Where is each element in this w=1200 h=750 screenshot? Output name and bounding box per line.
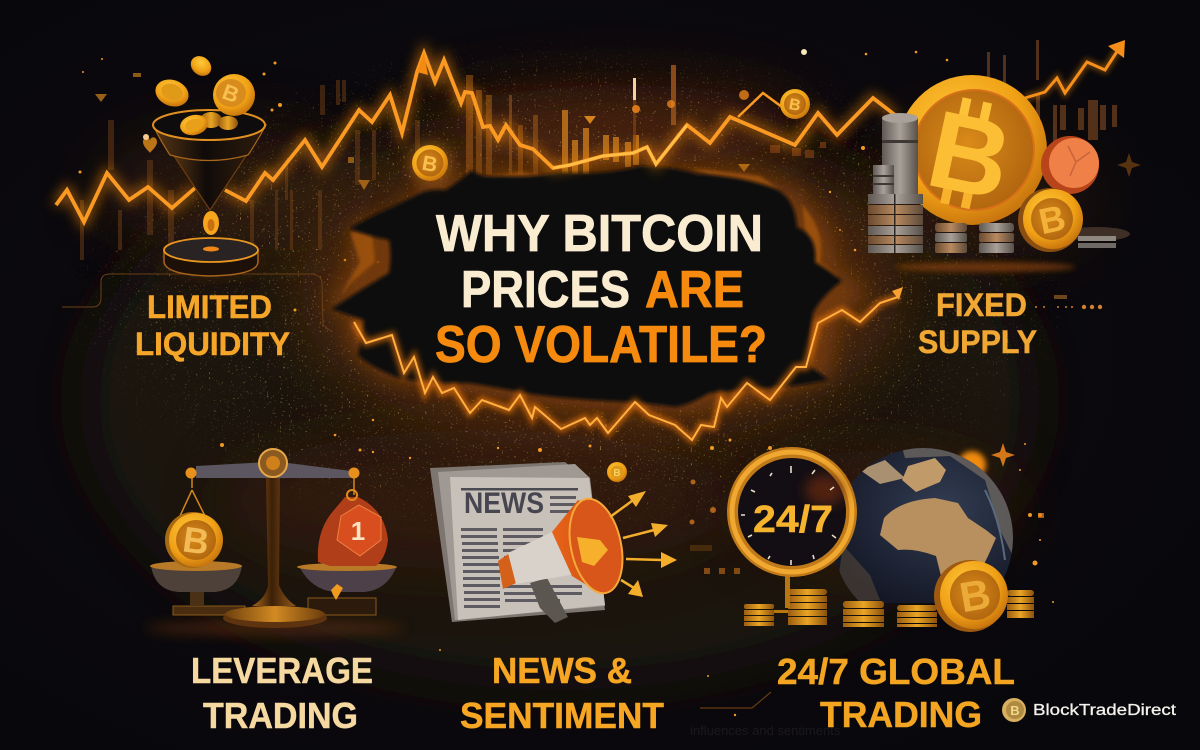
- icon: newspaper: [430, 462, 605, 622]
- icon: megaphone: [498, 494, 630, 623]
- background: [58, 36, 1098, 690]
- label: [135, 289, 290, 362]
- label: [918, 287, 1037, 360]
- sparkle stars: [632, 90, 1141, 574]
- particles: [78, 49, 1118, 716]
- logo coin: [1002, 698, 1026, 722]
- background candlestick bars: [80, 40, 1117, 260]
- icon: gold bitcoin coin: [934, 560, 1008, 632]
- icon: coins and stacks: [868, 75, 1130, 272]
- label: [191, 650, 373, 736]
- label: 24/7 GLOBAL: [777, 651, 1015, 692]
- label: SENTIMENT: [460, 695, 664, 736]
- dotted trail: [1035, 295, 1102, 309]
- icon: clock: 24/7: [753, 499, 833, 541]
- panel: 24/7 global trading: [700, 440, 1034, 735]
- connector bracket: [62, 274, 332, 332]
- label: TRADING: [203, 695, 358, 736]
- icon: globe: [836, 446, 1013, 603]
- central splatter: dark patch: [332, 166, 842, 407]
- icon: coin stacks: [744, 589, 1034, 627]
- title: PRICES: [461, 261, 630, 319]
- title: [435, 205, 767, 374]
- title: WHY BITCOIN: [436, 205, 763, 263]
- faint caption: influences and sentiments: [690, 723, 841, 738]
- label: TRADING: [820, 694, 982, 735]
- label: SUPPLY: [918, 324, 1037, 360]
- icon: arrows and coin: [610, 491, 677, 597]
- icon: balance scale: B: [180, 518, 212, 563]
- panel: news and sentiment: B: [613, 468, 621, 479]
- brand logo: [1002, 698, 1177, 722]
- panel: leverage trading: [145, 449, 405, 736]
- icon: balance scale: [145, 449, 405, 636]
- logo coin: B: [1010, 703, 1020, 718]
- icon: funnel with coins: B: [219, 79, 243, 108]
- small coin on price line: B: [788, 96, 802, 115]
- label: LEVERAGE: [191, 650, 373, 691]
- icon: clock: [727, 447, 857, 613]
- icon: coins and stacks: B: [1035, 197, 1069, 242]
- label: NEWS &: [492, 650, 632, 691]
- icon: balance scale: 1: [351, 516, 365, 546]
- label: LIMITED: [147, 289, 272, 325]
- panel: fixed supply: [868, 75, 1130, 360]
- icon: funnel with coins: [152, 52, 266, 278]
- label: [460, 650, 664, 736]
- top right rising arrow: [1025, 40, 1125, 98]
- connector line: [700, 692, 771, 708]
- panel: news and sentiment: [430, 462, 677, 736]
- top price line: [56, 53, 895, 222]
- label: LIQUIDITY: [135, 326, 290, 362]
- label: FIXED: [936, 287, 1027, 323]
- lower price line: [354, 287, 903, 440]
- title: SO VOLATILE?: [435, 316, 767, 374]
- icon: gold bitcoin coin: B: [956, 570, 994, 621]
- central splatter: orange halo: [326, 168, 868, 412]
- icon: coins and stacks: B: [918, 87, 1021, 224]
- brand name: BlockTradeDirect: [1033, 702, 1177, 719]
- title: ARE: [645, 261, 744, 319]
- icon: newspaper: NEWS: [464, 487, 544, 520]
- small coin left of title: B: [420, 152, 439, 177]
- label: [777, 651, 1015, 735]
- small coin on price line: [780, 89, 810, 119]
- small coin left of title: [408, 141, 452, 185]
- panel: limited liquidity: [62, 52, 332, 362]
